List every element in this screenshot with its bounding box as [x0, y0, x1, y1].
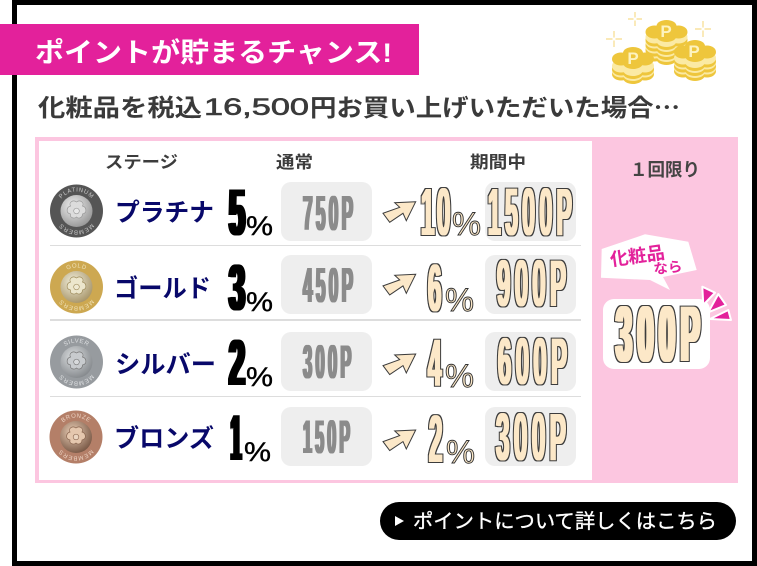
campaign rate: 10 [421, 174, 453, 250]
normal points [281, 332, 372, 391]
button: point details: ポイントについて詳しくはこちら [413, 510, 717, 533]
icon: gold badge [50, 260, 103, 314]
row: bronze [50, 399, 576, 477]
icon: gold coin stacks with sparkles [606, 12, 716, 84]
normal rate: % [246, 211, 273, 241]
campaign rate [428, 325, 474, 401]
campaign points: 300P [496, 399, 570, 475]
row: platinum [50, 174, 576, 250]
campaign rate: % [446, 434, 475, 470]
normal rate: 3 [229, 251, 245, 324]
arrow [383, 430, 416, 451]
row: gold [50, 246, 576, 326]
arrow [383, 202, 416, 222]
campaign rate: % [452, 206, 481, 242]
normal points: 150P [303, 411, 353, 464]
column headings [105, 153, 526, 172]
campaign points: 600P [498, 324, 571, 399]
icon: bronze badge [50, 410, 102, 464]
icon: gold badge: GOLD [66, 263, 86, 270]
callout: cosmetics speech bubble: なら [653, 258, 683, 277]
icon: bronze badge: BRONZE [61, 413, 91, 422]
icon: bronze badge: MEMBERS [59, 450, 94, 461]
campaign rate: 2 [429, 401, 442, 477]
one-time label: １回限り [630, 160, 700, 180]
column headings: ステージ [105, 153, 178, 172]
callout: 300P box: 300P [616, 289, 705, 378]
normal rate: % [244, 437, 271, 467]
icon: gold badge: MEMBERS [60, 300, 94, 311]
icon: pink burst [702, 287, 731, 320]
normal points [281, 182, 372, 241]
panel: white table area [39, 141, 592, 480]
campaign rate [421, 174, 481, 250]
icon: platinum badge [50, 184, 103, 238]
campaign points: 900P [497, 246, 570, 321]
arrow [383, 274, 416, 295]
row: silver [50, 324, 576, 401]
subheading [38, 88, 680, 123]
column headings: 期間中 [470, 153, 526, 172]
normal points: 450P [303, 258, 356, 313]
normal rate: 1 [231, 401, 241, 474]
icon: silver badge: SILVER [64, 338, 89, 346]
normal points [281, 407, 372, 466]
stage name: シルバー [115, 351, 216, 379]
normal rate: 5 [229, 175, 245, 249]
normal points: 750P [303, 186, 356, 241]
callout: cosmetics speech bubble: 化粧品 [609, 243, 666, 270]
column headings: 通常 [276, 153, 313, 172]
icon: silver badge: MEMBERS [60, 374, 94, 386]
campaign rate [429, 401, 475, 477]
subheading: 化粧品を税込 [38, 95, 202, 122]
button: point details [380, 502, 736, 540]
icon: platinum badge: PLATINUM [58, 187, 94, 198]
icon: gold coin stacks with sparkles: P [688, 42, 700, 61]
normal points: 300P [303, 337, 355, 389]
icon: gold coin stacks with sparkles: P [660, 22, 672, 41]
icon: silver badge [50, 336, 103, 388]
title banner [0, 24, 419, 75]
arrow [383, 354, 416, 375]
stage name: ブロンズ [114, 424, 214, 453]
campaign rate: 6 [428, 250, 441, 326]
icon: platinum badge: MEMBERS [60, 224, 94, 235]
campaign rate [428, 250, 474, 326]
panel: pink background [35, 137, 738, 483]
normal rate: % [246, 362, 273, 392]
campaign rate: 4 [428, 325, 441, 401]
campaign points: 1500P [488, 175, 576, 250]
normal rate: % [246, 287, 273, 317]
title banner: ポイントが貯まるチャンス! [35, 37, 392, 68]
stage name: プラチナ [115, 199, 214, 227]
callout: cosmetics speech bubble [601, 234, 697, 290]
normal points [281, 255, 372, 314]
normal rate: 2 [229, 326, 245, 399]
subheading: 円お買い上げいただいた場合… [310, 88, 680, 123]
stage name: ゴールド [114, 274, 211, 303]
campaign rate: % [445, 282, 474, 318]
campaign rate: % [445, 358, 474, 394]
icon: gold coin stacks with sparkles: P [627, 49, 639, 68]
subheading: 16,500 [204, 94, 309, 121]
